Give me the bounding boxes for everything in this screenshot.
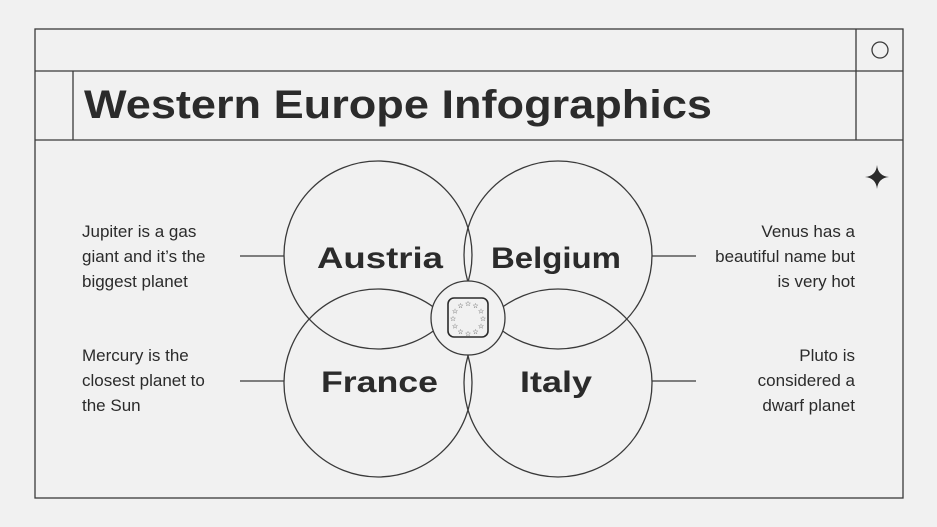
center emblem: ☆	[452, 308, 458, 316]
right texts: is very hot	[778, 272, 855, 291]
right texts: dwarf planet	[762, 396, 855, 415]
icon: small circle	[872, 42, 888, 58]
right texts	[715, 222, 856, 415]
center emblem: ☆	[478, 308, 484, 316]
center emblem	[431, 281, 505, 355]
center emblem: ☆	[452, 322, 458, 330]
country labels: France	[321, 366, 438, 399]
center emblem: ☆	[472, 328, 479, 336]
center emblem: ☆	[480, 315, 486, 323]
right texts: Pluto is	[799, 346, 855, 365]
country labels	[317, 242, 621, 399]
left texts: the Sun	[82, 396, 141, 415]
center emblem: ☆	[465, 330, 471, 338]
left texts: giant and it’s the	[82, 247, 206, 266]
country labels: Belgium	[491, 242, 621, 275]
left texts: Jupiter is a gas	[82, 222, 196, 241]
left texts: biggest planet	[82, 272, 188, 291]
center emblem: ☆	[472, 302, 479, 310]
title: Western Europe Infographics	[84, 83, 712, 127]
country labels: Austria	[317, 242, 443, 275]
center emblem: ☆	[450, 315, 456, 323]
center emblem: ☆	[465, 300, 471, 308]
center emblem: ☆	[457, 328, 464, 336]
right texts: considered a	[758, 371, 856, 390]
left texts	[82, 222, 206, 415]
right texts: beautiful name but	[715, 247, 855, 266]
venn diagram	[240, 161, 696, 477]
right texts: Venus has a	[761, 222, 856, 241]
center emblem: ☆	[457, 302, 464, 310]
center emblem: ☆	[478, 322, 484, 330]
icon: sparkle	[865, 165, 889, 189]
left texts: Mercury is the	[82, 346, 189, 365]
left texts: closest planet to	[82, 371, 205, 390]
country labels: Italy	[520, 366, 592, 399]
